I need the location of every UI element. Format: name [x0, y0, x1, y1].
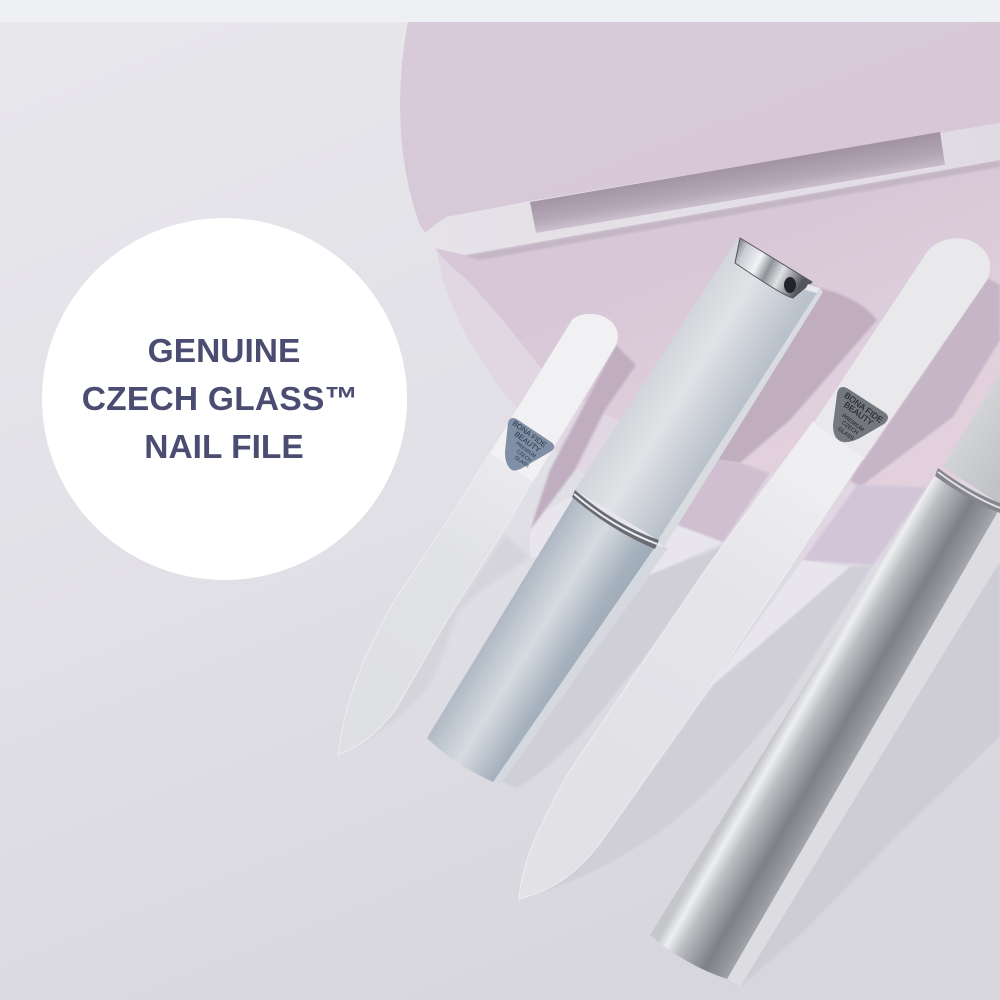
ring highlight [574, 494, 657, 544]
side light band [727, 510, 1000, 987]
large silver case [650, 373, 1000, 987]
disc top face [400, 22, 1000, 487]
frosted blade [338, 453, 533, 755]
headline: GENUINE [148, 333, 300, 370]
lit ground patches [530, 480, 850, 687]
pink disc pedestal [400, 22, 1000, 565]
shadow: case on ground [497, 545, 725, 788]
top band [0, 0, 1000, 22]
side light band [493, 545, 668, 785]
grit strip [530, 132, 945, 233]
pick shape [505, 418, 554, 471]
logo text: BONA FIDE [842, 390, 885, 425]
grit handle [490, 314, 618, 482]
shadow: case on disc face [660, 288, 877, 540]
upper body [575, 238, 820, 540]
file under-shadow [465, 160, 1000, 260]
cap highlight [805, 284, 820, 293]
shadow: large file on disc face [850, 278, 1000, 487]
frosted glass body [420, 123, 1000, 255]
headline: CZECH GLASS™ [82, 381, 358, 418]
frosted blade [519, 422, 863, 899]
shadow: big case on ground [727, 561, 1000, 987]
logo text: PREMIUM [514, 441, 537, 460]
small glass nail file [338, 314, 618, 755]
chrome ring [572, 490, 659, 549]
glass file lying on disc [420, 123, 1000, 260]
shadow: large file on disc side [803, 485, 927, 565]
disc side [425, 225, 1000, 565]
logo badge [505, 418, 554, 471]
logo text: CZECH [515, 449, 533, 464]
cap dark spot [784, 277, 796, 293]
cast shadows [345, 278, 1000, 987]
pick shape [833, 387, 888, 442]
headline: NAIL FILE [144, 429, 304, 466]
logo text [511, 419, 548, 470]
shadow: small file on disc [530, 345, 636, 530]
upper body [943, 373, 1000, 504]
white badge circle [42, 218, 407, 580]
handle sparkle section [780, 422, 863, 500]
ring highlight [938, 472, 1000, 508]
lower body [427, 495, 655, 782]
logo text: BONA FIDE [511, 419, 548, 449]
logo text: PREMIUM [840, 413, 865, 433]
upper side light band [657, 288, 823, 547]
chrome cap top [735, 238, 812, 298]
shadow: small file on ground [345, 535, 530, 752]
glass edge highlight [536, 166, 945, 234]
large glass nail file [519, 238, 990, 899]
logo badge [833, 387, 888, 442]
silver-blue nail file case [427, 238, 823, 785]
shadow: case on disc side [650, 460, 770, 550]
logo text: BEAUTY [513, 430, 542, 454]
chrome ring [935, 468, 1000, 513]
logo text: GLASS [513, 455, 531, 470]
shadow: large file on ground [519, 565, 873, 899]
logo text: BEAUTY [842, 400, 876, 428]
lower body [650, 472, 1000, 979]
logo text: GLASS [836, 426, 855, 442]
headline [82, 333, 358, 466]
logo text: CZECH [840, 420, 859, 436]
logo text [836, 390, 885, 442]
grit handle [813, 238, 990, 460]
